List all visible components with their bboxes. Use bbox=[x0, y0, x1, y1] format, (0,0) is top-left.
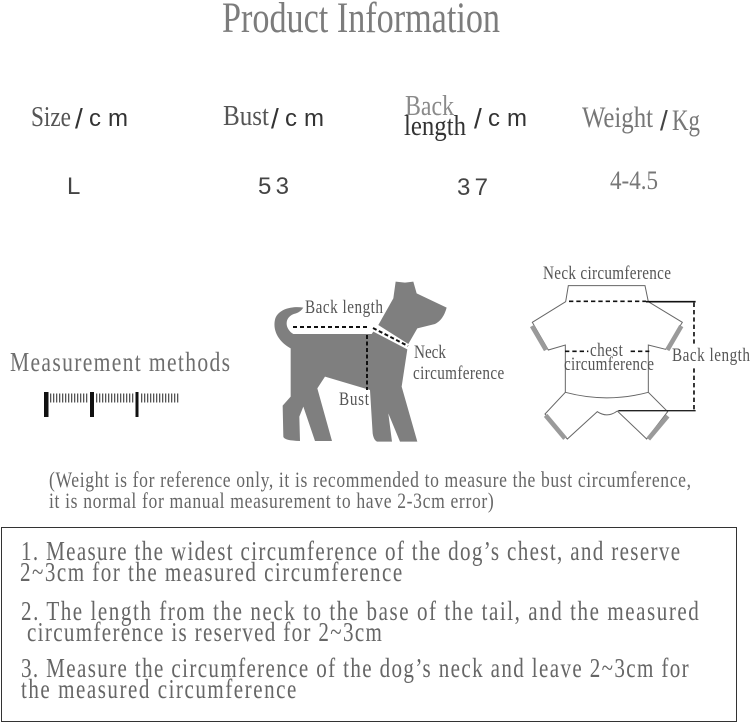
column: weight: / bbox=[660, 105, 668, 136]
weight note: it is normal for manual measurement to have 2-3cm error) bbox=[49, 489, 494, 514]
column: weight bbox=[582, 101, 700, 195]
neck dashed line bbox=[373, 328, 408, 346]
step 3: 3. Measure the circumference of the dog’s neck and leave 2~3cm for bbox=[21, 654, 689, 684]
label: bust: Bust bbox=[339, 388, 369, 409]
label: back length: Back length bbox=[672, 344, 750, 365]
column: weight: Kg bbox=[672, 104, 700, 137]
step 1: 2~3cm for the measured circumference bbox=[20, 558, 402, 588]
column: back length bbox=[404, 91, 527, 201]
label: back length: Back length bbox=[305, 296, 383, 317]
step 3 bbox=[21, 654, 689, 705]
dog diagram bbox=[274, 282, 505, 442]
garment diagram bbox=[532, 262, 750, 439]
label: circumference: circumference bbox=[564, 353, 654, 374]
step 2: circumference is reserved for 2~3cm bbox=[27, 618, 382, 648]
label: chest: chest bbox=[590, 339, 623, 360]
step 2 bbox=[21, 597, 699, 648]
label: circumference: circumference bbox=[413, 362, 505, 383]
label: neck: Neck bbox=[414, 341, 446, 362]
step 2: 2. The length from the neck to the base of the tail, and the measured bbox=[21, 597, 699, 627]
column: weight: 4-4.5 bbox=[610, 166, 658, 195]
weight note: (Weight is for reference only, it is recommended to measure the bust circumference, bbox=[49, 468, 691, 493]
back length dashed line bbox=[293, 326, 369, 328]
step 1 bbox=[20, 537, 680, 588]
column: back length: 37 bbox=[457, 174, 488, 201]
label: neck circumference: Neck circumference bbox=[543, 262, 671, 283]
column: back length: Back bbox=[405, 91, 454, 122]
column: size: / bbox=[75, 103, 83, 134]
back length measure solid lines bbox=[646, 299, 696, 304]
column: bust: / bbox=[271, 103, 279, 134]
column: back length: / bbox=[474, 103, 482, 134]
step 3: the measured circumference bbox=[21, 675, 296, 705]
bust dashed line bbox=[366, 335, 368, 390]
column: size: Size bbox=[31, 101, 71, 133]
icon: ruler bbox=[44, 392, 179, 417]
weight note bbox=[49, 468, 691, 514]
column: size: cm bbox=[89, 105, 128, 132]
column: size: L bbox=[67, 173, 80, 200]
column: bust bbox=[223, 100, 324, 200]
column: weight: Weight bbox=[582, 101, 654, 134]
measurement methods heading: Measurement methods bbox=[10, 348, 230, 378]
measure dashed lines bbox=[565, 301, 694, 410]
column: back length: length bbox=[404, 111, 466, 142]
instructions panel bbox=[2, 528, 736, 722]
garment outline bbox=[532, 286, 696, 439]
column: bust: 53 bbox=[258, 173, 289, 200]
icon: dog silhouette bbox=[274, 282, 447, 442]
column: size bbox=[31, 101, 128, 200]
step 1: 1. Measure the widest circumference of the dog’s chest, and reserve bbox=[21, 537, 680, 567]
panel border bbox=[2, 528, 736, 722]
column: back length: cm bbox=[488, 105, 527, 132]
column: bust: Bust bbox=[223, 100, 269, 132]
column: bust: cm bbox=[285, 105, 324, 132]
sleeve cuffs bbox=[532, 326, 681, 439]
size table bbox=[31, 91, 700, 201]
